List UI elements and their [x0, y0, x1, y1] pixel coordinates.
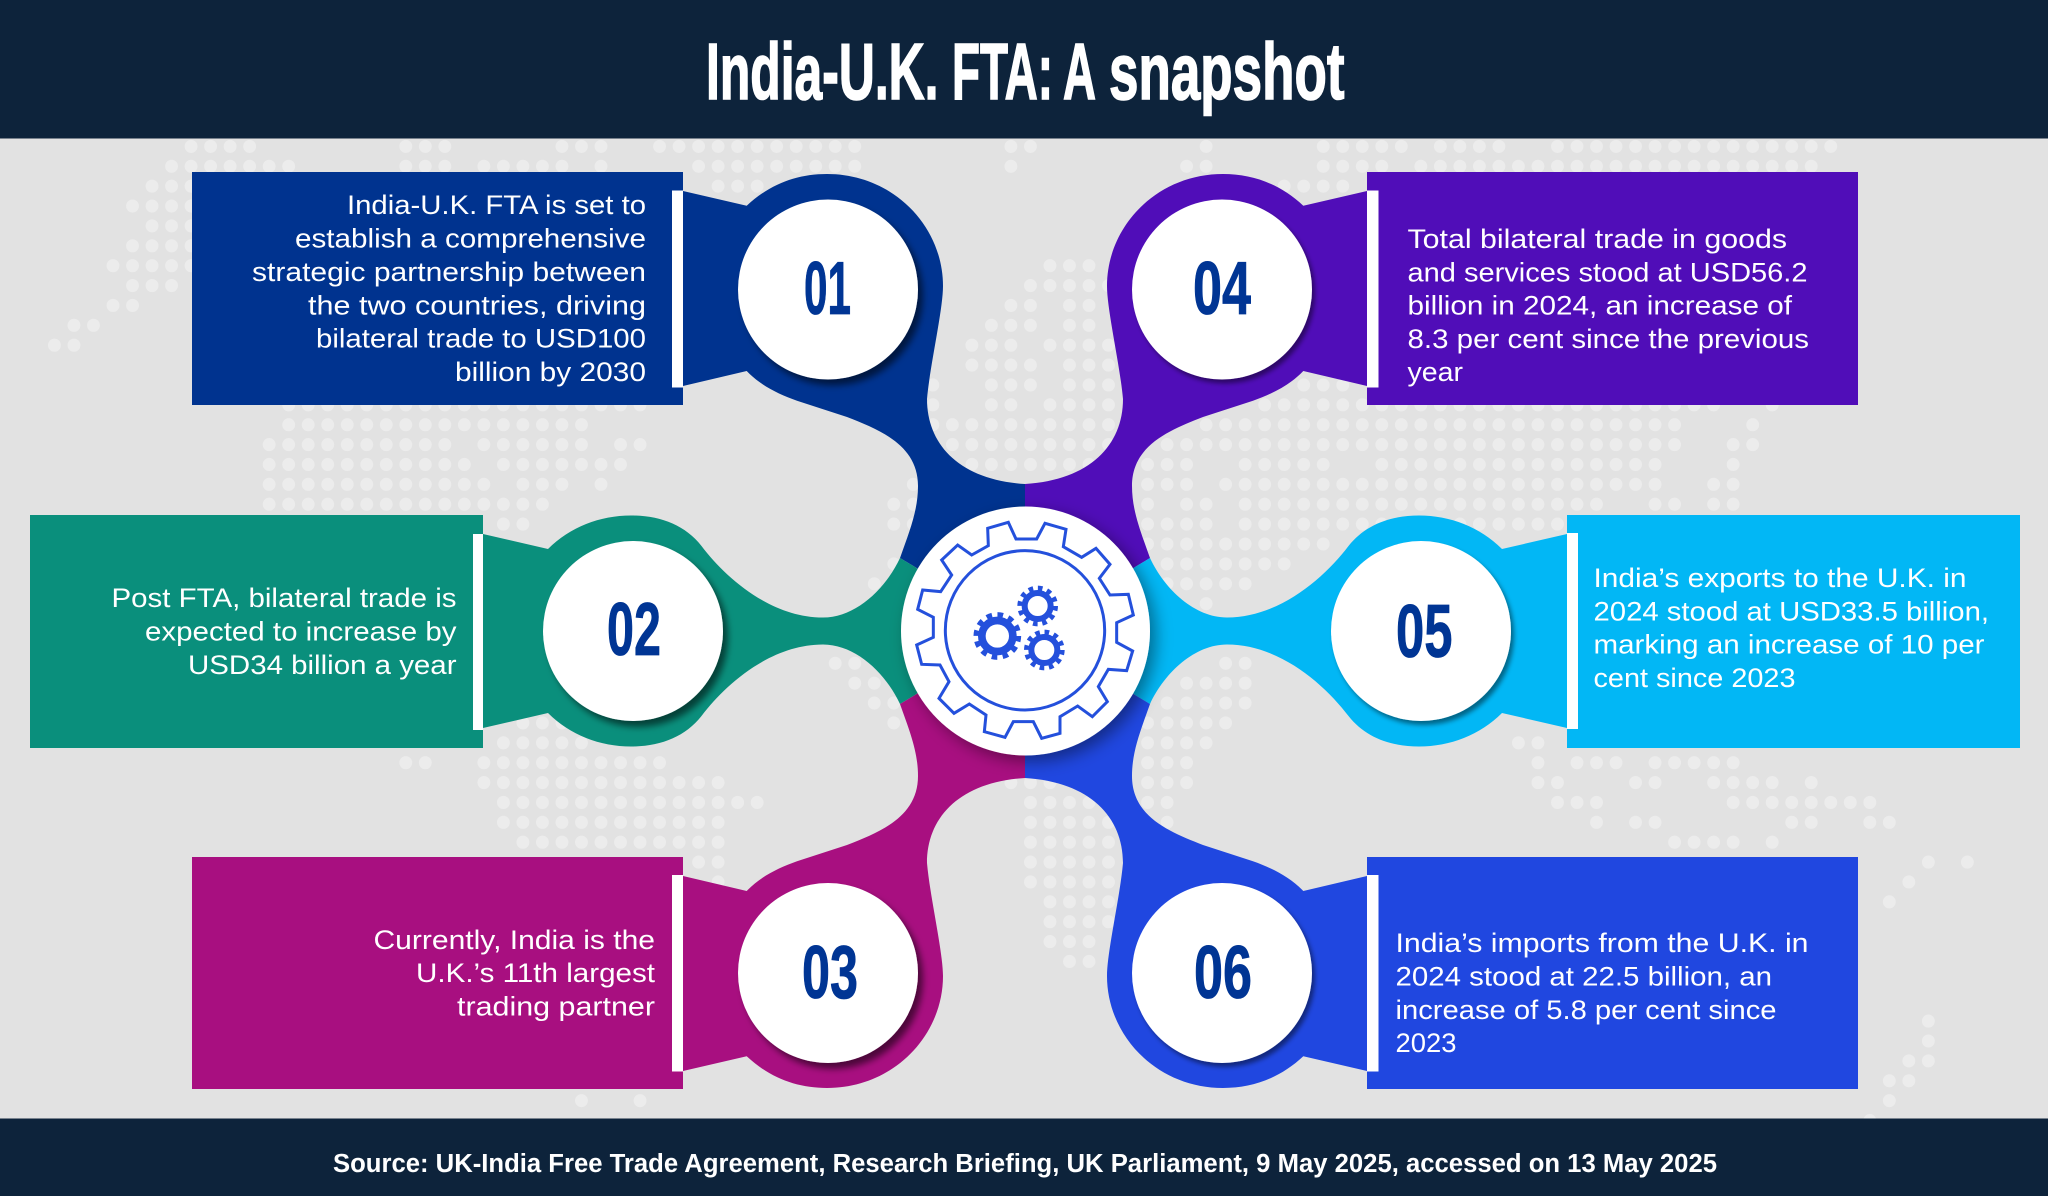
- hub circle: [901, 506, 1150, 756]
- text 02: Post FTA, bilateral trade is: [112, 583, 456, 613]
- text 04: year: [1408, 357, 1463, 387]
- text box 04: [1367, 172, 1858, 405]
- text 02: USD34 billion a year: [188, 650, 457, 680]
- text 01: India-U.K. FTA is set to: [347, 190, 646, 220]
- text 06: 2024 stood at 22.5 billion, an: [1396, 962, 1772, 992]
- title: FTA:: [952, 27, 1053, 116]
- text 05: India’s exports to the U.K. in: [1594, 563, 1966, 593]
- text 01: bilateral trade to USD100: [316, 324, 646, 354]
- text box 06: [1367, 857, 1858, 1089]
- text 05: marking an increase of 10 per: [1594, 630, 1985, 660]
- text 06: India’s imports from the U.K. in: [1396, 928, 1808, 958]
- text 04: 8.3 per cent since the previous: [1408, 324, 1809, 354]
- text box 02: [30, 515, 483, 748]
- title: A: [1063, 27, 1096, 116]
- text box 05: [1567, 515, 2020, 748]
- text 06: 2023: [1396, 1028, 1456, 1058]
- connector shape 06: [1025, 622, 1367, 1088]
- connector shape 02: [483, 516, 1000, 746]
- text 01: billion by 2030: [455, 357, 646, 387]
- connector shape 05: [1050, 516, 1567, 746]
- text 02: expected to increase by: [145, 616, 457, 646]
- text 01: strategic partnership between: [252, 257, 646, 287]
- dotted world map background: [54, 146, 1968, 1121]
- number circle 01: [738, 200, 918, 380]
- text 06: increase of 5.8 per cent since: [1396, 995, 1776, 1025]
- footer bar: [0, 1118, 2048, 1196]
- white bar 04: [1367, 190, 1378, 388]
- number 03: 03: [802, 930, 858, 1014]
- text 06: [1396, 928, 1808, 1058]
- text 05: cent since 2023: [1594, 663, 1796, 693]
- text 01: establish a comprehensive: [295, 224, 646, 254]
- text 05: 2024 stood at USD33.5 billion,: [1594, 596, 1989, 626]
- connector shape 03: [683, 622, 1025, 1088]
- number circle 02: [543, 541, 723, 721]
- centre hub with gear icon: [901, 506, 1150, 756]
- text 03: Currently, India is the: [374, 925, 655, 955]
- connector shape 01: [683, 174, 1025, 640]
- text box 03: [192, 857, 683, 1089]
- panel: item 04: [1025, 172, 1858, 640]
- panel: item 05: [1050, 515, 2020, 748]
- text 01: the two countries, driving: [308, 290, 646, 320]
- number 05: 05: [1396, 589, 1452, 673]
- title: India-U.K.: [706, 27, 938, 116]
- text 04: and services stood at USD56.2: [1408, 257, 1808, 287]
- white bar 05: [1567, 533, 1578, 729]
- number 02: 02: [607, 587, 661, 671]
- text box 01: [192, 172, 683, 405]
- icon: gears: [917, 522, 1133, 738]
- panel: item 01: [192, 172, 1025, 640]
- number circle 06: [1132, 883, 1312, 1063]
- number circle 03: [738, 883, 918, 1063]
- white bar 02: [473, 534, 483, 730]
- connector shape 04: [1025, 174, 1367, 640]
- text 04: [1408, 224, 1809, 387]
- white bar 03: [672, 875, 683, 1072]
- number circle 05: [1331, 541, 1511, 721]
- number 04: 04: [1193, 246, 1251, 330]
- text 01: [252, 190, 646, 387]
- number 01: 01: [804, 246, 851, 330]
- header bar: [0, 0, 2048, 138]
- number circle 04: [1132, 200, 1312, 380]
- text 05: [1594, 563, 1989, 693]
- panel: item 02: [30, 515, 1000, 748]
- text 02: [112, 583, 457, 680]
- title: snapshot: [1109, 27, 1344, 116]
- text 04: billion in 2024, an increase of: [1408, 291, 1793, 321]
- panel: item 06: [1025, 622, 1858, 1089]
- number 06: 06: [1194, 930, 1252, 1014]
- text 03: [374, 925, 656, 1022]
- text 03: trading partner: [457, 992, 655, 1022]
- text 04: Total bilateral trade in goods: [1408, 224, 1787, 254]
- text 03: U.K.’s 11th largest: [416, 958, 656, 988]
- white bar 06: [1367, 875, 1378, 1072]
- source note: Source: UK-India Free Trade Agreement, Research Briefing, UK Parliament, 9 May 2025, accessed on 13 May 2025: [333, 1150, 1717, 1178]
- panel: item 03: [192, 622, 1025, 1089]
- white bar 01: [672, 190, 683, 388]
- title: [706, 27, 1344, 116]
